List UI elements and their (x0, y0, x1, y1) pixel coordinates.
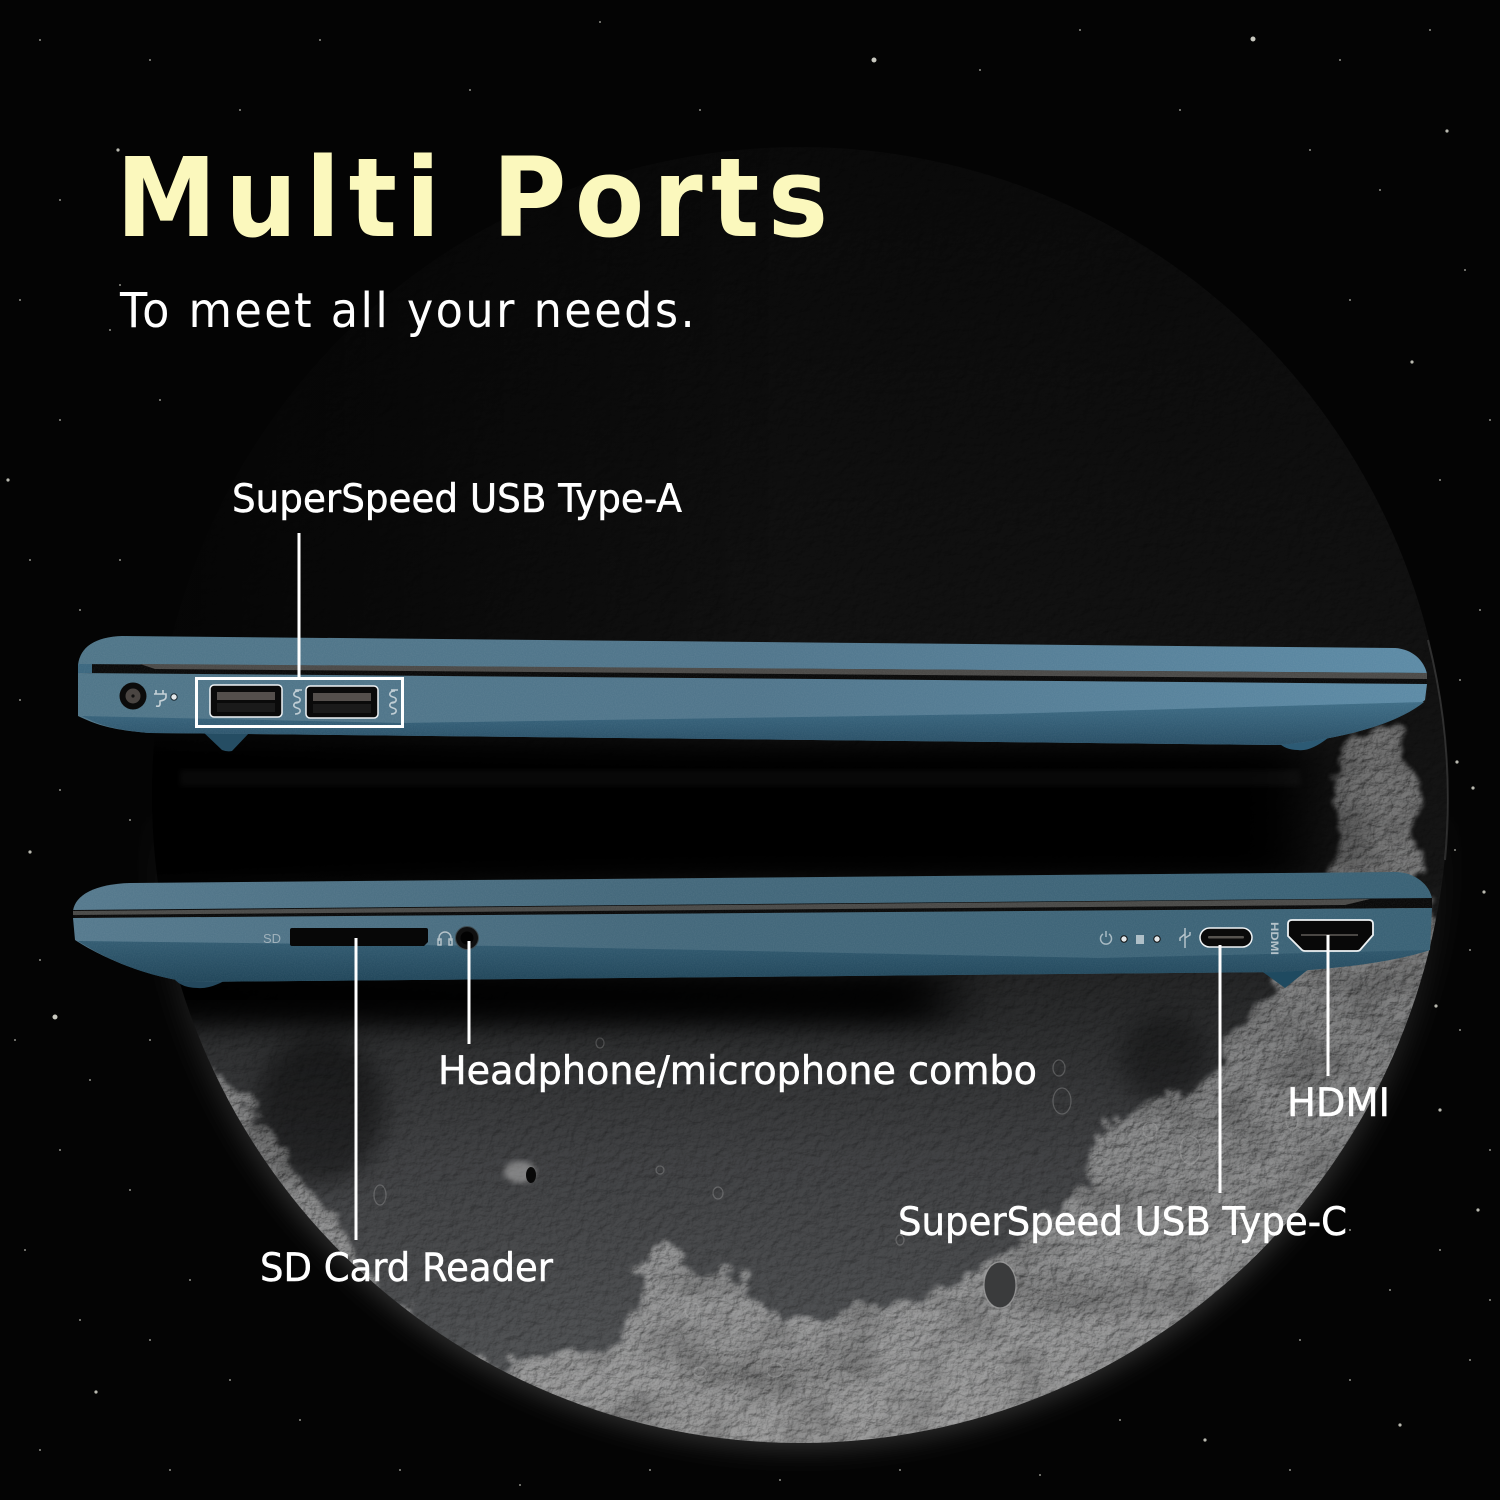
faint reflected glare (180, 770, 1300, 786)
lid (78, 636, 1427, 674)
leader line: USB-C (1218, 945, 1222, 1193)
upper laptop: left side view (78, 636, 1427, 751)
moon craters (374, 1038, 1298, 1405)
base (78, 673, 1427, 745)
left limb fade on upper moon (150, 140, 770, 1000)
USB 3 logo 1 (294, 690, 302, 714)
label: SuperSpeed USB Type-C: SuperSpeed USB Type-C (898, 1200, 1347, 1245)
moon dark crater with ray splash (504, 1161, 536, 1183)
headphone icon (438, 932, 452, 945)
power jack (120, 682, 146, 710)
highland rough texture and blotches (216, 724, 1436, 1443)
metal grain (78, 636, 1427, 745)
lower laptop: right side view (73, 872, 1432, 988)
label: Headphone/microphone combo: Headphone/microphone combo (438, 1049, 1037, 1094)
callout box: USB-A ports (196, 678, 402, 726)
HDMI mark: HDMI (1268, 922, 1280, 955)
hinge gap (73, 898, 1432, 918)
leader line: headphone (468, 941, 470, 1044)
base (73, 908, 1432, 982)
USB-C port (1200, 928, 1252, 947)
power icon and LED (154, 690, 177, 706)
label: HDMI: HDMI (1287, 1081, 1390, 1126)
subtitle: To meet all your needs. (119, 282, 695, 338)
leader line: SD card (354, 938, 358, 1240)
shadow band between laptops (236, 742, 1354, 880)
metal grain (73, 872, 1432, 982)
rubber foot right (1260, 968, 1310, 988)
rubber foot left (175, 980, 226, 988)
leader line: USB-A (298, 533, 300, 678)
moon glow (145, 140, 1455, 1450)
USB symbol (1180, 928, 1190, 948)
headphone jack (456, 926, 478, 950)
HDMI port (1288, 920, 1373, 951)
base lower bevel (82, 702, 1424, 745)
hinge gap (78, 664, 1427, 684)
SD card slot (290, 928, 428, 946)
moon base disc (194, 147, 1448, 1372)
moon dark patches (255, 1015, 1210, 1430)
title: Multi Ports (116, 134, 828, 262)
USB-A port 1 (210, 685, 282, 717)
SD mark: SD (263, 931, 281, 946)
base lower bevel (78, 941, 1430, 982)
USB 3 logo 2 (390, 690, 398, 714)
rubber foot left (201, 730, 251, 751)
moon surface texture (211, 733, 1434, 1442)
lid (73, 872, 1432, 911)
status lights (1100, 931, 1160, 944)
USB-A port 2 (306, 686, 378, 718)
moon (156, 278, 1448, 1443)
label: SD Card Reader: SD Card Reader (260, 1246, 554, 1291)
moon right rim light (1428, 640, 1448, 860)
moon bright highlands (212, 722, 1436, 1443)
shadow band under lower laptop (0, 968, 950, 1026)
label: SuperSpeed USB Type-A: SuperSpeed USB Type-A (232, 477, 682, 522)
rubber foot right (1278, 738, 1328, 750)
leader line: HDMI (1326, 935, 1330, 1076)
